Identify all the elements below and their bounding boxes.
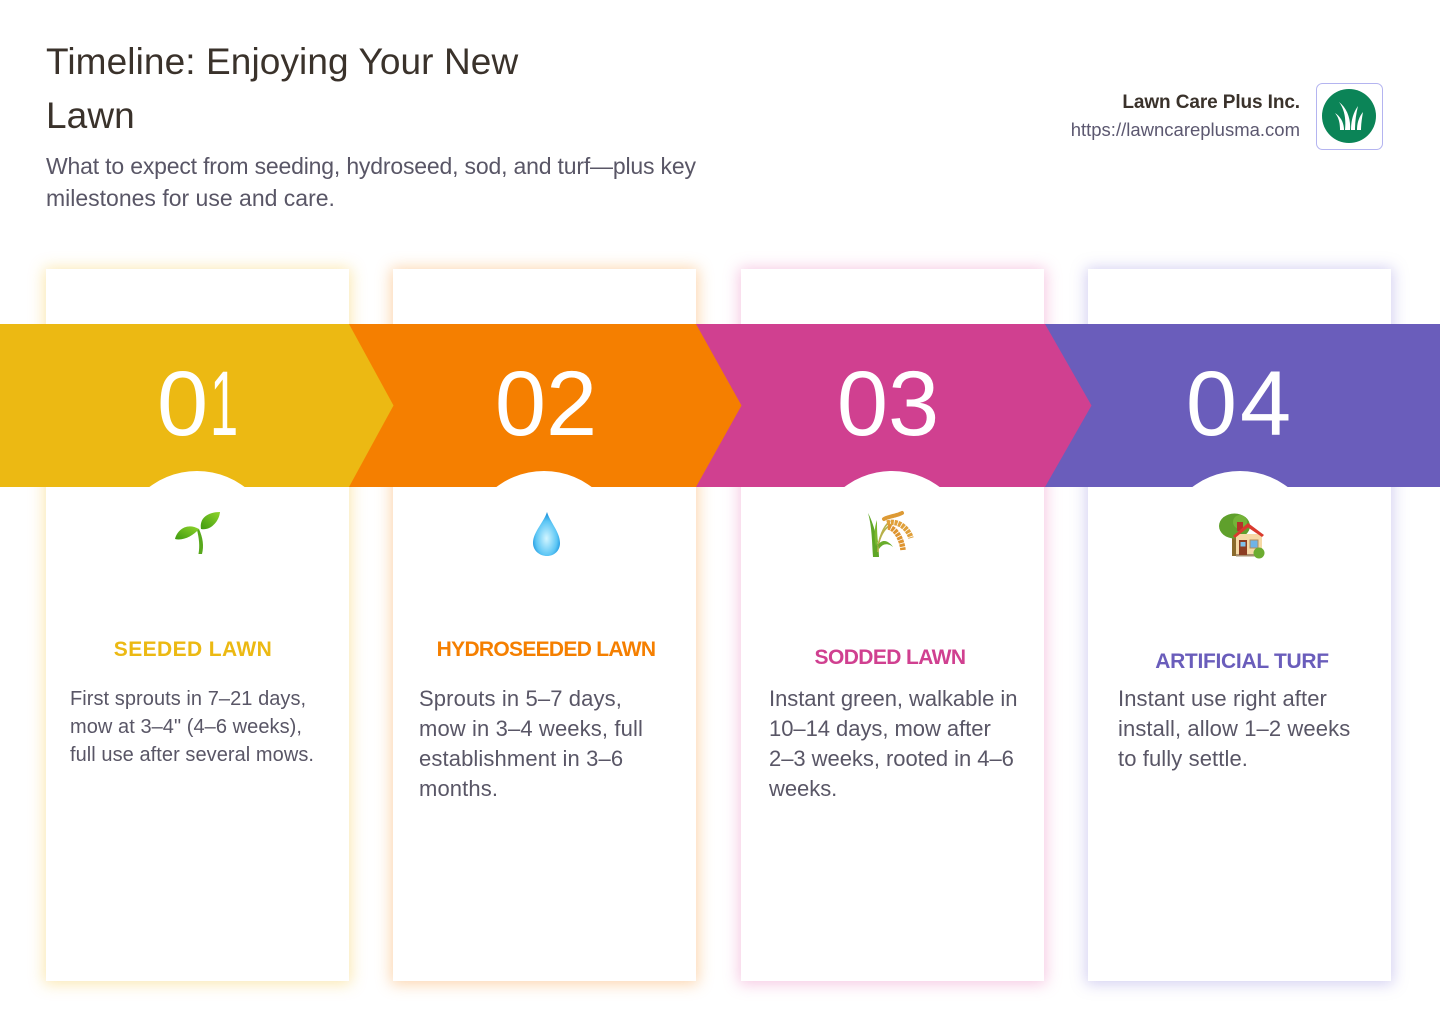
subtitle xyxy=(46,153,696,211)
text: hydroseeded lawn details: establishment in 3–6 xyxy=(419,746,623,771)
text: hydroseeded lawn details xyxy=(419,686,643,801)
company name and website xyxy=(1071,92,1300,140)
title: Lawn xyxy=(46,95,135,136)
text: artificial turf details: install, allow 1–2 weeks xyxy=(1118,716,1350,741)
panel: seeded lawn card xyxy=(46,269,349,981)
step number 01 xyxy=(157,353,238,455)
text: artificial turf details xyxy=(1118,686,1350,771)
text: sodded lawn details: weeks. xyxy=(769,776,837,801)
heading: artificial turf: ARTIFICIAL TURF xyxy=(1155,650,1329,673)
chevron arrow band xyxy=(0,324,1440,487)
panel: hydroseeded lawn card xyxy=(393,269,696,981)
heading: hydroseeded lawn: HYDROSEEDED LAWN xyxy=(437,638,655,661)
text: sodded lawn details: 10–14 days, mow after xyxy=(769,716,991,741)
text: hydroseeded lawn details: mow in 3–4 weeks, full xyxy=(419,716,643,741)
company name and website: Lawn Care Plus Inc. xyxy=(1122,92,1300,113)
step number 03: 03 xyxy=(837,353,939,455)
icon: water drop xyxy=(533,512,560,556)
text: hydroseeded lawn details: months. xyxy=(419,776,498,801)
text: hydroseeded lawn details: Sprouts in 5–7 days, xyxy=(419,686,622,711)
heading: sodded lawn: SODDED LAWN xyxy=(815,646,965,669)
text: sodded lawn details xyxy=(769,686,1017,801)
company name and website: https://lawncareplusma.com xyxy=(1071,119,1300,140)
step number 04: 04 xyxy=(1186,353,1294,455)
text: sodded lawn details: Instant green, walkable in xyxy=(769,686,1017,711)
icon: company logo xyxy=(1316,83,1383,150)
title xyxy=(46,41,518,136)
text: sodded lawn details: 2–3 weeks, rooted in 4–6 xyxy=(769,746,1014,771)
icon: house with tree xyxy=(1219,514,1264,558)
title: Timeline: Enjoying Your New xyxy=(46,41,518,82)
heading: seeded lawn: SEEDED LAWN xyxy=(114,638,272,661)
text: seeded lawn details: First sprouts in 7–21 days, xyxy=(70,688,306,710)
icon: seedling xyxy=(175,512,220,554)
text: seeded lawn details xyxy=(70,688,314,766)
text: seeded lawn details: full use after several mows. xyxy=(70,744,314,766)
text: artificial turf details: to fully settle. xyxy=(1118,746,1248,771)
text: seeded lawn details: mow at 3–4" (4–6 weeks), xyxy=(70,716,302,738)
subtitle: What to expect from seeding, hydroseed, sod, and turf—plus key xyxy=(46,153,696,179)
step number 02: 02 xyxy=(495,353,597,455)
panel: artificial turf card xyxy=(1088,269,1391,981)
step number 01: 0 xyxy=(157,353,208,455)
icon: rice sheaf xyxy=(868,510,914,557)
panel: sodded lawn card xyxy=(741,269,1044,981)
subtitle: milestones for use and care. xyxy=(46,185,335,211)
text: artificial turf details: Instant use right after xyxy=(1118,686,1327,711)
step number 01: 1 xyxy=(210,353,238,455)
